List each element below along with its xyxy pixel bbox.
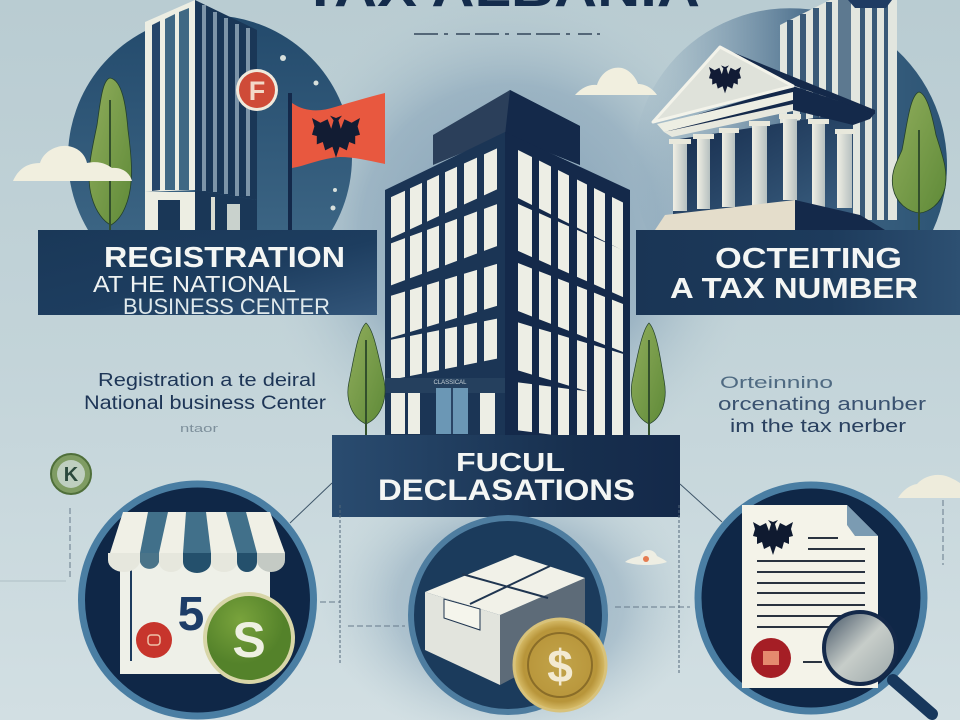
tree right xyxy=(892,92,946,230)
small tree left of building xyxy=(348,323,385,436)
banner line two: A TAX NUMBER xyxy=(670,273,918,305)
columns xyxy=(673,118,852,211)
document xyxy=(742,505,878,688)
shop awning xyxy=(108,512,285,573)
left face xyxy=(385,132,505,436)
right face xyxy=(505,132,630,436)
description: registration: National business Center xyxy=(84,393,327,414)
tower left xyxy=(145,0,257,230)
cloud top center xyxy=(575,68,657,95)
panel: tax number illustration xyxy=(633,0,947,230)
description: tax number: im the tax nerber xyxy=(730,416,906,436)
cloud right xyxy=(898,475,960,498)
magnifying glass xyxy=(824,612,932,714)
panel: registration illustration xyxy=(13,0,385,230)
right face windows xyxy=(518,150,623,444)
box xyxy=(425,555,585,685)
small cloud with orange dot xyxy=(625,550,667,565)
cloud left xyxy=(13,146,132,181)
description: tax number: Orteinnino xyxy=(720,373,833,392)
description: registration: ntaor xyxy=(180,423,219,435)
banner heading: OCTEITING xyxy=(715,243,902,275)
flag xyxy=(288,93,385,230)
panel: central building xyxy=(348,90,665,444)
banner heading: REGISTRATION xyxy=(104,242,345,274)
description: tax number: orcenating anunber xyxy=(718,394,926,414)
steps xyxy=(655,200,795,230)
tree left xyxy=(89,78,132,230)
shop body xyxy=(120,560,270,674)
banner: tax number xyxy=(636,230,960,315)
gold coin: $ xyxy=(547,640,573,692)
description: registration: Registration a te deiral xyxy=(98,370,316,390)
banner: registration xyxy=(38,230,377,319)
dollar five sign: 5 xyxy=(178,588,204,641)
banner line three: BUSINESS CENTER xyxy=(123,294,330,319)
bank roof xyxy=(665,86,875,134)
banner line two: AT HE NATIONAL xyxy=(93,271,296,297)
left face windows xyxy=(391,148,497,380)
red badge: F xyxy=(249,76,265,106)
banner: declarations xyxy=(332,435,680,517)
banner heading: FUCUL xyxy=(456,447,565,477)
banner line two: DECLASATIONS xyxy=(378,474,635,507)
specks on circle xyxy=(280,55,337,210)
description: tax number xyxy=(718,373,926,436)
red badge xyxy=(236,69,278,111)
icon: box circle xyxy=(411,518,606,712)
green coin xyxy=(205,594,293,682)
tower right xyxy=(780,0,897,220)
small tree right of building xyxy=(631,323,665,436)
ground floor: CLASSICAL xyxy=(433,380,467,386)
ground floor xyxy=(385,378,505,434)
icon: document circle xyxy=(698,485,932,714)
connector lines xyxy=(0,483,943,675)
gold coin xyxy=(514,619,606,711)
red sticker xyxy=(136,622,172,658)
right backdrop circle xyxy=(633,8,947,230)
left backdrop circle xyxy=(68,15,352,230)
icon: shop circle xyxy=(82,484,314,716)
icon: small green badge xyxy=(51,454,91,494)
government building xyxy=(653,47,885,230)
description: registration xyxy=(84,370,327,435)
central building roof block xyxy=(433,90,580,165)
icon: small green badge: K xyxy=(64,464,79,486)
green coin: S xyxy=(232,612,266,668)
title divider xyxy=(414,33,600,35)
